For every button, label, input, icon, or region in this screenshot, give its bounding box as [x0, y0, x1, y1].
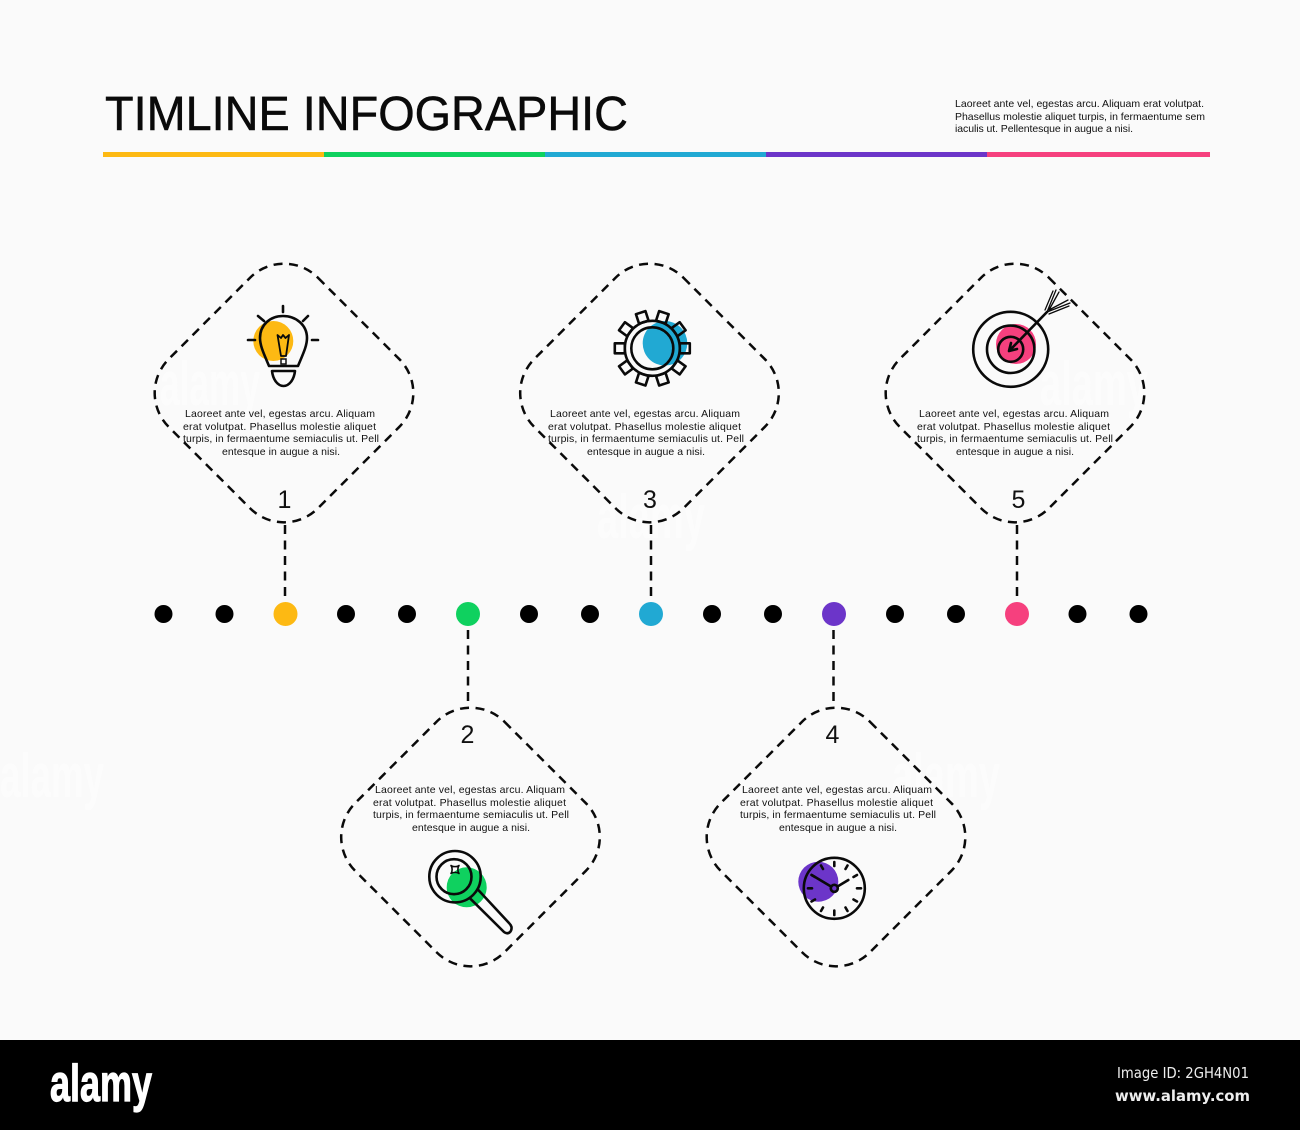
icon: target: [973, 290, 1070, 387]
timeline dots: [154, 602, 1148, 626]
step 1 text: entesque in augue a nisi.: [222, 446, 340, 458]
connector 5: [1016, 525, 1018, 602]
step 2 panel: [321, 688, 620, 986]
step 1 text: erat volutpat. Phasellus molestie aliquet: [183, 421, 376, 433]
step 1 text: turpis, in fermaentume semiaculis ut. Pell: [183, 433, 379, 445]
step 1 text: [183, 408, 379, 458]
step 5 text: erat volutpat. Phasellus molestie aliquet: [917, 421, 1110, 433]
colour bar: [103, 152, 1210, 157]
step 3 text: erat volutpat. Phasellus molestie aliquet: [548, 421, 741, 433]
step 1 text: Laoreet ante vel, egestas arcu. Aliquam: [185, 408, 375, 420]
step 3 number: 3: [643, 486, 657, 514]
step 5 text: turpis, in fermaentume semiaculis ut. Pell: [917, 433, 1113, 445]
text: alamy: [160, 350, 260, 419]
step 4 text: erat volutpat. Phasellus molestie aliquet: [740, 797, 933, 809]
text: alamy: [0, 742, 104, 811]
step 2 text: entesque in augue a nisi.: [412, 822, 530, 834]
step 4 text: Laoreet ante vel, egestas arcu. Aliquam: [742, 784, 932, 796]
step 1 panel: [135, 244, 433, 542]
step 2 text: Laoreet ante vel, egestas arcu. Aliquam: [375, 784, 565, 796]
step 2 number: 2: [461, 721, 474, 749]
connector 1: [284, 525, 286, 602]
step 5 text: [917, 408, 1113, 458]
connector 2: [467, 630, 469, 705]
footer url: www.alamy.com: [1115, 1087, 1250, 1105]
icon: clock: [798, 858, 865, 919]
header description: iaculis ut. Pellentesque in augue a nisi.: [955, 123, 1133, 135]
step 4 number: 4: [826, 721, 840, 749]
step 5 text: entesque in augue a nisi.: [956, 446, 1074, 458]
step 3 panel: [500, 244, 799, 542]
icon: gear: [615, 311, 690, 386]
footer bar: [0, 1040, 1300, 1130]
step 4 text: entesque in augue a nisi.: [779, 822, 897, 834]
icon: light bulb: [248, 306, 318, 386]
footer image id: Image ID: 2GH4N01: [1117, 1064, 1249, 1082]
step 4 panel: [687, 688, 985, 986]
icon: magnifier: [429, 851, 512, 933]
title: TIMLINE INFOGRAPHIC: [105, 88, 628, 141]
text: alamy: [597, 483, 705, 552]
step 3 text: Laoreet ante vel, egestas arcu. Aliquam: [550, 408, 740, 420]
header description: [955, 98, 1205, 135]
header description: Phasellus molestie aliquet turpis, in fermaentume sem: [955, 111, 1205, 123]
step 3 text: turpis, in fermaentume semiaculis ut. Pell: [548, 433, 744, 445]
footer logo: alamy: [50, 1055, 152, 1113]
step 5 number: 5: [1012, 486, 1025, 514]
step 2 text: erat volutpat. Phasellus molestie aliquet: [373, 797, 566, 809]
header description: Laoreet ante vel, egestas arcu. Aliquam erat volutpat.: [955, 98, 1204, 110]
connector 4: [832, 630, 835, 705]
step 4 text: [740, 784, 936, 834]
step 5 panel: [866, 244, 1164, 542]
step 3 text: entesque in augue a nisi.: [587, 446, 705, 458]
step 4 text: turpis, in fermaentume semiaculis ut. Pell: [740, 809, 936, 821]
step 5 text: Laoreet ante vel, egestas arcu. Aliquam: [919, 408, 1109, 420]
step 2 text: turpis, in fermaentume semiaculis ut. Pell: [373, 809, 569, 821]
step 1 number: 1: [278, 486, 291, 514]
text: alamy: [892, 742, 1000, 811]
text: alamy: [1040, 350, 1148, 419]
step 2 text: [373, 784, 569, 834]
step 3 text: [548, 408, 744, 458]
connector 3: [650, 525, 652, 602]
